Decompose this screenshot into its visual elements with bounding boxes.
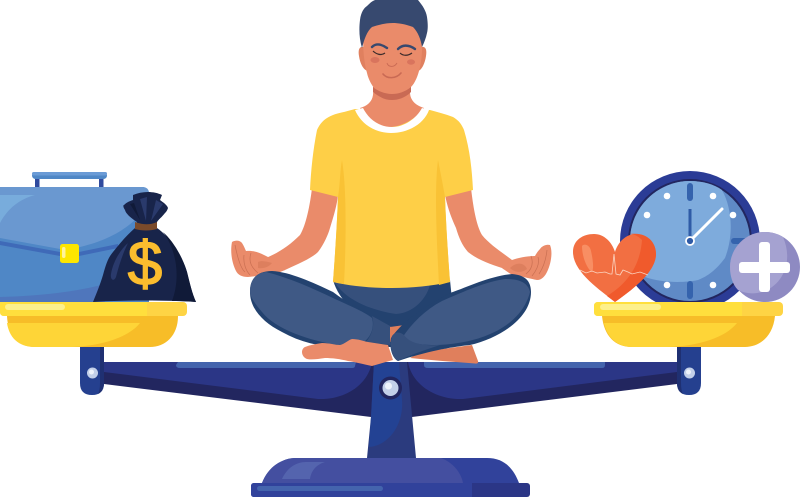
left pan	[0, 302, 187, 347]
clasp	[60, 244, 79, 263]
right pan	[594, 302, 783, 347]
plus badge	[730, 232, 800, 302]
neck	[360, 80, 424, 127]
clock ticks	[644, 193, 736, 288]
smile	[383, 73, 401, 78]
shirt	[310, 109, 473, 288]
left hanger	[80, 345, 104, 395]
left foot	[302, 339, 393, 366]
face	[363, 21, 422, 94]
right hanger	[677, 345, 701, 395]
hair	[359, 0, 428, 48]
clock hands	[686, 209, 722, 245]
pillar	[367, 362, 416, 458]
nose	[387, 63, 397, 66]
ears	[359, 47, 368, 71]
right leg	[390, 274, 531, 361]
right arm	[445, 188, 520, 277]
person	[231, 0, 551, 366]
ankle	[390, 324, 417, 342]
cheeks	[370, 57, 380, 63]
heart	[573, 234, 656, 302]
collar	[355, 108, 429, 133]
pelvis	[333, 280, 452, 332]
left leg	[250, 271, 392, 347]
briefcase	[0, 172, 149, 302]
money bag	[93, 192, 196, 302]
clock	[620, 171, 760, 311]
eyes	[373, 51, 385, 54]
left hand	[231, 241, 285, 277]
neck shadow	[373, 87, 411, 100]
money bag: $	[128, 230, 162, 299]
eyebrows	[372, 44, 387, 48]
beam	[104, 362, 677, 417]
left arm	[255, 188, 338, 277]
right hand	[502, 245, 551, 280]
pivot	[379, 376, 402, 400]
right foot	[410, 345, 478, 364]
scale stand	[80, 345, 701, 497]
base	[251, 458, 530, 497]
